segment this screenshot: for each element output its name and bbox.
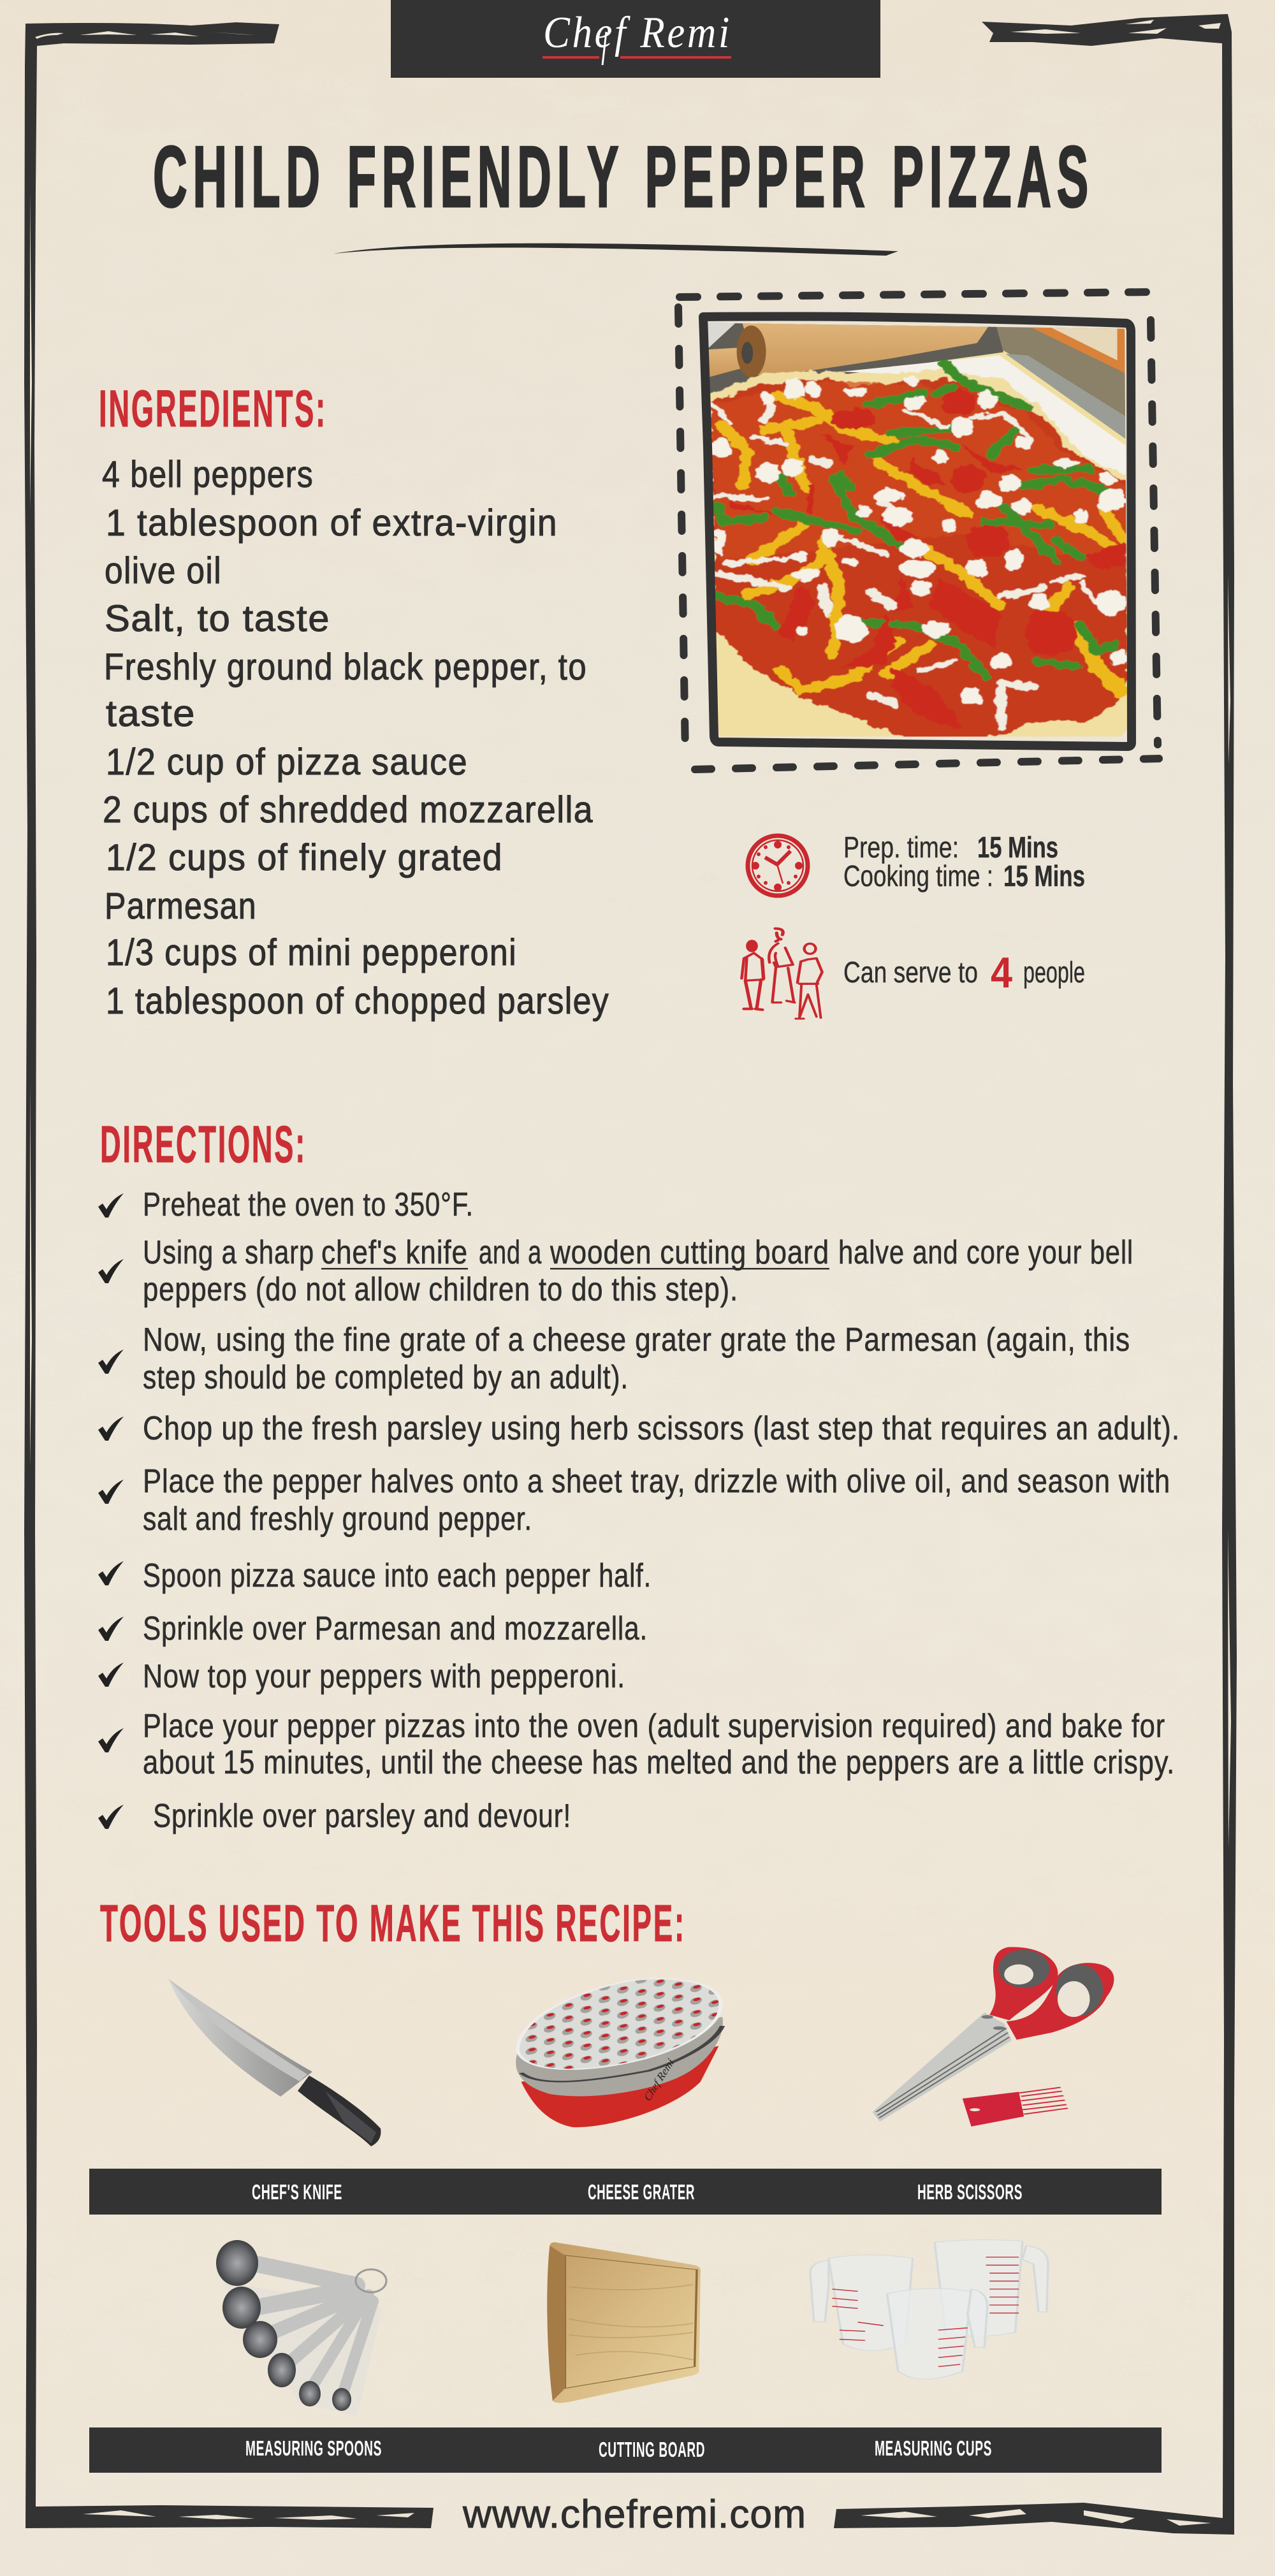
title underline stroke (333, 244, 898, 256)
directions steps: Using a sharp (143, 1234, 314, 1271)
heading: tools: TOOLS USED TO MAKE THIS RECIPE: (100, 1895, 686, 1953)
panel: tools (89, 1895, 1162, 2473)
heading: ingredients: INGREDIENTS: (99, 380, 327, 438)
ingredients list: olive oil (105, 550, 222, 592)
tool: chef's knife (168, 1979, 381, 2146)
ingredients list: 1/2 cups of finely grated (106, 837, 503, 878)
ingredients list: taste (106, 693, 196, 734)
panel: ingredients (99, 380, 609, 1022)
cooking time text: Cooking time : (843, 859, 993, 892)
ingredients list: 1/3 cups of mini pepperoni (106, 932, 517, 973)
check marks (98, 1193, 124, 1829)
pizza photo (703, 319, 1133, 743)
can serve text: Can serve to (843, 956, 978, 989)
labels bar: row one (89, 2169, 1162, 2215)
pizza toppings (709, 363, 1128, 740)
labels bar: row two (89, 2427, 1162, 2473)
labels bar: row two: MEASURING CUPS (875, 2436, 992, 2460)
header logo bar (391, 0, 880, 78)
panel: directions (98, 1116, 1180, 1835)
heading: directions: DIRECTIONS: (100, 1116, 307, 1174)
tool: cutting board (547, 2242, 701, 2403)
ingredients list: 1 tablespoon of extra-virgin (106, 502, 558, 544)
directions steps: and a (479, 1234, 542, 1271)
labels bar: row one: HERB SCISSORS (917, 2180, 1023, 2204)
directions steps: salt and freshly ground pepper. (143, 1501, 532, 1538)
photo frame stroke (703, 316, 1132, 746)
ingredients list: Freshly ground black pepper, to (104, 646, 587, 688)
prep time text: Prep. time: (843, 831, 959, 864)
icon: clock (748, 836, 808, 896)
directions steps: Now top your peppers with pepperoni. (143, 1658, 625, 1695)
tool: measuring cups (810, 2239, 1048, 2379)
directions steps: step should be completed by an adult). (143, 1359, 629, 1396)
directions steps: Preheat the oven to 350°F. (143, 1186, 474, 1223)
directions steps: halve and core your bell (838, 1234, 1133, 1271)
directions steps (143, 1186, 1180, 1835)
website footer: www.chefremi.com (462, 2492, 806, 2536)
directions steps: Spoon pizza sauce into each pepper half. (143, 1557, 652, 1594)
labels bar: row two: MEASURING SPOONS (245, 2436, 382, 2460)
panel: servings (741, 929, 1085, 1019)
ingredients list: Salt, to taste (105, 598, 330, 639)
people text: people (1023, 956, 1085, 989)
tool: herb scissors (873, 1947, 1114, 2127)
grater logo: Chef Remi (642, 2056, 676, 2104)
directions steps: peppers (do not allow children to do this step). (143, 1271, 738, 1308)
directions steps: chef's knife (321, 1234, 468, 1271)
ingredients list: 1 tablespoon of chopped parsley (106, 980, 609, 1022)
icon: three people (741, 929, 822, 1019)
ingredients list: Parmesan (105, 885, 257, 927)
logo: Chef Remi: Chef Remi (543, 8, 732, 57)
panel: time info (748, 831, 1085, 896)
directions steps: Now, using the fine grate of a cheese grater grate the Parmesan (again, this (143, 1321, 1130, 1358)
labels bar: row two: CUTTING BOARD (599, 2438, 705, 2461)
labels bar: row one: CHEESE GRATER (588, 2180, 695, 2204)
cooking time value: 15 Mins (1003, 859, 1085, 892)
labels bar: row one: CHEF'S KNIFE (252, 2180, 342, 2204)
dashed photo frame (678, 292, 1159, 769)
ingredients list: 1/2 cup of pizza sauce (106, 741, 468, 783)
ingredients list (102, 454, 609, 1022)
ingredients list: 2 cups of shredded mozzarella (103, 789, 594, 831)
directions steps: Sprinkle over parsley and devour! (153, 1798, 571, 1835)
number of people: 4 (991, 949, 1012, 997)
directions steps: wooden cutting board (550, 1234, 829, 1271)
ingredients list: 4 bell peppers (102, 454, 314, 495)
prep time value: 15 Mins (977, 831, 1058, 864)
tool: measuring spoons (216, 2240, 386, 2416)
tool: cheese grater (516, 1979, 723, 2127)
directions steps: Sprinkle over Parmesan and mozzarella. (143, 1610, 648, 1647)
